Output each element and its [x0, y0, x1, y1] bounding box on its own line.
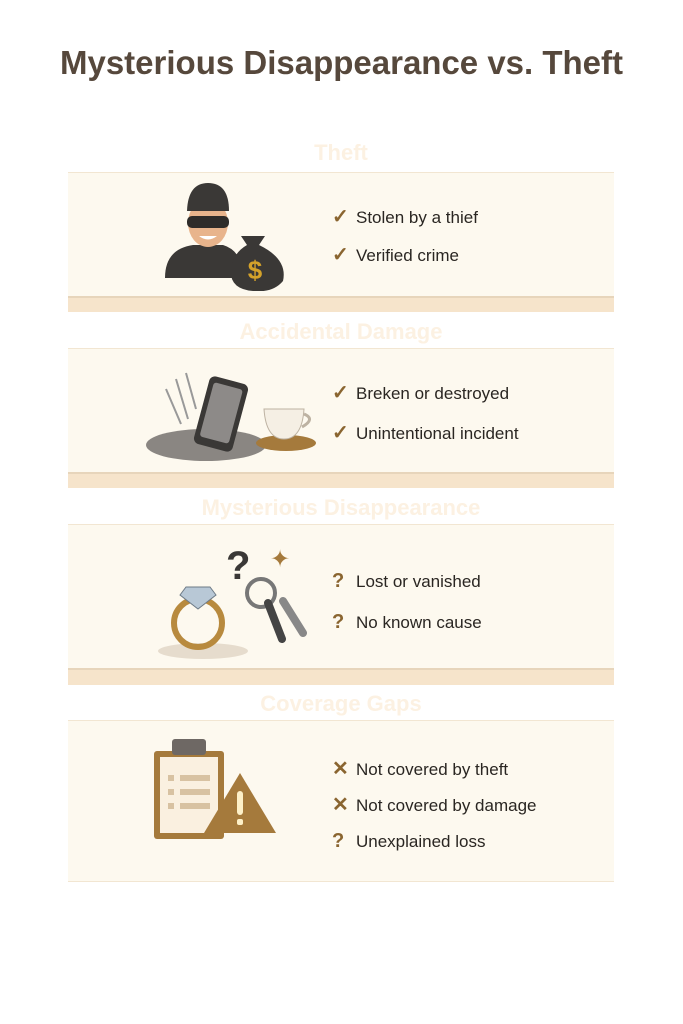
- panel: accidental damage: [68, 348, 614, 473]
- icon: broken phone and cup: [146, 372, 316, 461]
- panel: mysterious disappearance: [68, 524, 614, 669]
- icon: ring and keys with question mark: ?: [226, 544, 250, 588]
- panel: accidental damage: Unintentional incident: [356, 424, 519, 443]
- text: damage items: ✓: [332, 382, 349, 404]
- heading: theft: Theft: [314, 140, 368, 165]
- text: theft items: ✓: [332, 206, 349, 228]
- panel: mysterious disappearance: ?: [332, 611, 344, 633]
- panel: coverage gaps: Not covered by damage: [356, 796, 536, 815]
- icon: ring and keys with question mark: [158, 544, 307, 659]
- heading: accidental damage: Accidental Damage: [240, 319, 442, 344]
- text: damage items: Breken or destroyed: [356, 384, 509, 403]
- panel: theft: [68, 172, 614, 297]
- panel: coverage gaps: ?: [332, 830, 344, 852]
- icon: thief with money bag: $: [248, 255, 263, 285]
- heading: coverage gaps: Coverage Gaps: [260, 691, 422, 716]
- text: disappearance items: Lost or vanished: [356, 572, 481, 591]
- panel: accidental damage: ✓: [332, 422, 349, 444]
- panel: coverage gaps: [68, 720, 614, 882]
- text: coverage gap items: ✕: [332, 758, 349, 780]
- panel: coverage gaps: ✕: [332, 794, 349, 816]
- text: theft items: Stolen by a thief: [356, 208, 478, 227]
- panel: coverage gaps: Unexplained loss: [356, 832, 485, 851]
- text: disappearance items: ?: [332, 570, 344, 592]
- text: coverage gap items: Not covered by theft: [356, 760, 508, 779]
- icon: clipboard with warning: [154, 739, 276, 839]
- heading: mysterious disappearance: Mysterious Disappearance: [202, 495, 480, 520]
- title: Mysterious Disappearance vs. Theft: [60, 44, 623, 81]
- panel: mysterious disappearance: No known cause: [356, 613, 482, 632]
- panel: theft: Verified crime: [356, 246, 459, 265]
- panel: theft: ✓: [332, 244, 349, 266]
- icon: ring and keys with question mark: ✦: [270, 546, 290, 573]
- icon: thief with money bag: [165, 183, 284, 291]
